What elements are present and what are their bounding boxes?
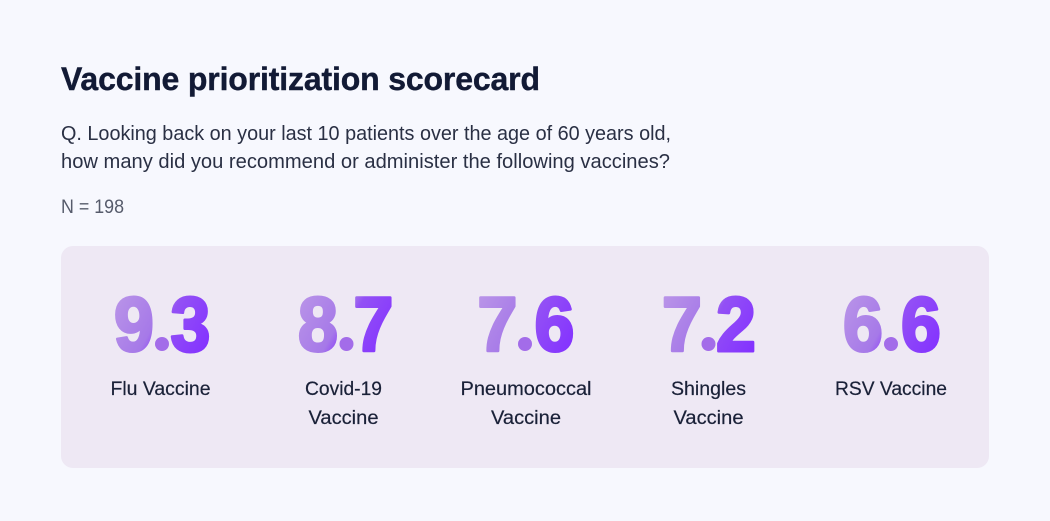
panel: scorecard xyxy=(61,246,989,468)
score: covid-19 vaccine xyxy=(298,282,393,429)
score: covid-19 vaccine: 8 xyxy=(298,282,338,368)
question text: Q. Looking back on your last 10 patients over the age of 60 years old, xyxy=(61,123,671,145)
score: rsv vaccine: 6 xyxy=(843,282,883,368)
question text: how many did you recommend or administer the following vaccines? xyxy=(61,151,670,173)
score: flu vaccine: 9 xyxy=(114,282,154,368)
score: covid-19 vaccine: 7 xyxy=(354,282,393,368)
question text xyxy=(61,123,671,173)
score: pneumococcal vaccine: Pneumococcal xyxy=(460,379,592,400)
score: pneumococcal vaccine: 6 xyxy=(534,282,574,368)
score: shingles vaccine: Vaccine xyxy=(674,408,744,429)
score: pneumococcal vaccine xyxy=(460,282,592,429)
score: flu vaccine: 3 xyxy=(170,282,210,368)
score: rsv vaccine: RSV Vaccine xyxy=(835,379,947,400)
score: flu vaccine xyxy=(110,282,210,400)
score: pneumococcal vaccine: Vaccine xyxy=(491,408,561,429)
score: covid-19 vaccine: Covid-19 xyxy=(305,379,382,400)
score: shingles vaccine: 2 xyxy=(716,282,756,368)
score: shingles vaccine xyxy=(662,282,756,429)
score: rsv vaccine: 6 xyxy=(901,282,941,368)
score: shingles vaccine: Shingles xyxy=(671,379,746,400)
sample size: N = 198 xyxy=(61,197,124,218)
score: covid-19 vaccine: Vaccine xyxy=(308,408,378,429)
title: Vaccine prioritization scorecard xyxy=(61,61,540,97)
score: rsv vaccine xyxy=(835,282,947,400)
score: shingles vaccine: 7 xyxy=(662,282,702,368)
score: flu vaccine: Flu Vaccine xyxy=(110,379,210,400)
score: pneumococcal vaccine: 7 xyxy=(477,282,517,368)
